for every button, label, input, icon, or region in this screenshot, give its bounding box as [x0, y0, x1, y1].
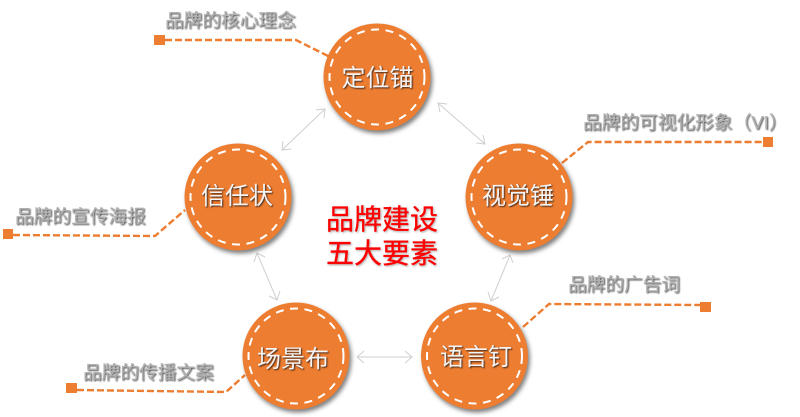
- circle: [324, 24, 430, 130]
- leader line: [562, 142, 763, 163]
- panel: 定位锚: [154, 10, 430, 130]
- circle label: 定位锚: [342, 65, 414, 92]
- dashed ring: [248, 308, 344, 404]
- arrow: 定位锚 to 信任状: [282, 109, 325, 150]
- caption: 品牌的广告词: [568, 274, 680, 295]
- circle: [466, 144, 572, 250]
- central title: [326, 204, 438, 269]
- caption: 品牌的核心理念: [165, 10, 296, 31]
- caption: 品牌的宣传海报: [15, 206, 146, 227]
- marker square: [763, 137, 773, 147]
- marker square: [154, 35, 165, 45]
- circle: [242, 302, 350, 410]
- marker square: [3, 229, 13, 239]
- dashed ring: [190, 150, 286, 244]
- panel: 场景布: [66, 302, 350, 410]
- marker square: [66, 383, 77, 393]
- caption: 品牌的传播文案: [83, 362, 214, 383]
- circle label: 视觉锤: [482, 183, 554, 210]
- panel: 信任状: [3, 144, 292, 250]
- dashed ring: [427, 308, 522, 404]
- caption: 品牌的可视化形象（VI）: [583, 112, 788, 133]
- leader line: [77, 375, 245, 392]
- dashed ring: [472, 150, 566, 244]
- circle label: 信任状: [201, 183, 273, 210]
- panel: 视觉锤: [466, 112, 788, 250]
- circle label: 语言钉: [440, 344, 512, 371]
- arrow: 场景布 to 语言钉: [357, 351, 412, 363]
- panel: 语言钉: [421, 274, 711, 410]
- central title: 五大要素: [326, 238, 438, 269]
- circle: [184, 144, 292, 250]
- marker square: [700, 302, 711, 312]
- arrow: 定位锚 to 视觉锤: [438, 103, 485, 144]
- leader line: [13, 210, 185, 236]
- circle label: 场景布: [257, 346, 329, 373]
- central title: 品牌建设: [326, 204, 438, 235]
- leader line: [523, 304, 700, 327]
- circle: [421, 302, 528, 410]
- arrow: 信任状 to 场景布: [254, 253, 280, 300]
- leader line: [165, 40, 328, 56]
- arrow: 视觉锤 to 语言钉: [488, 255, 513, 301]
- dashed ring: [330, 30, 424, 124]
